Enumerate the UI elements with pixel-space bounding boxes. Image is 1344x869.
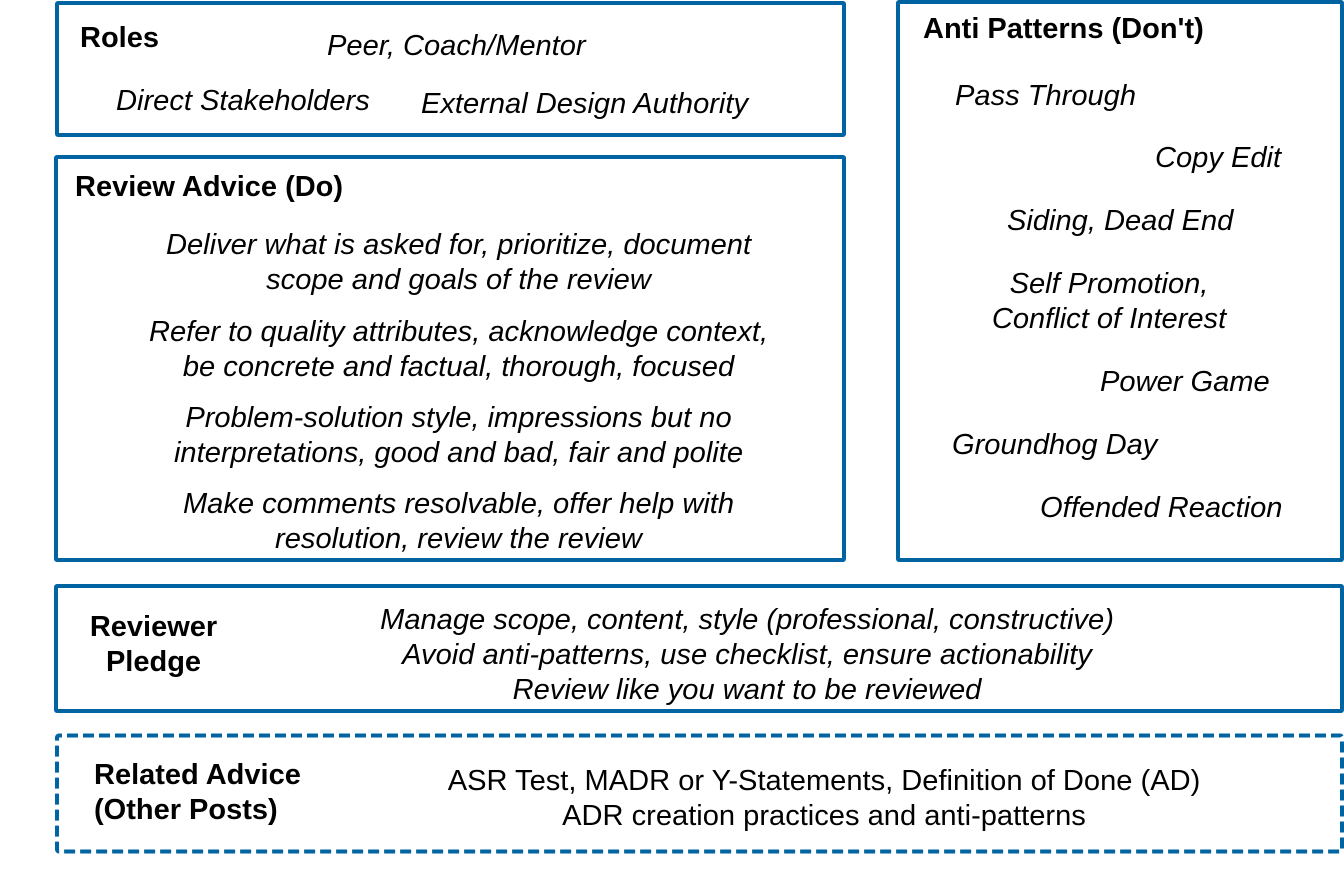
text: pass through: Pass Through bbox=[955, 80, 1136, 112]
text: self promotion: Self Promotion, bbox=[1010, 268, 1208, 300]
text: advice 3: interpretations, good and bad, fair and polite bbox=[174, 437, 743, 469]
text: pledge bbox=[380, 604, 1114, 706]
text: direct stakeholders: Direct Stakeholders bbox=[116, 85, 370, 117]
text: self promotion bbox=[992, 268, 1228, 335]
text: siding, dead end: Siding, Dead End bbox=[1007, 205, 1233, 237]
heading: review advice: Review Advice (Do) bbox=[75, 171, 343, 203]
text: related: ASR Test, MADR or Y-Statements, Definition of Done (AD) bbox=[448, 765, 1200, 797]
heading: reviewer pledge: Pledge bbox=[106, 646, 201, 678]
panel: anti patterns bbox=[896, 0, 1344, 562]
text: advice 4 bbox=[183, 488, 734, 555]
text: advice 3: Problem-solution style, impressions but no bbox=[185, 402, 732, 434]
text: self promotion: Conflict of Interest bbox=[992, 303, 1226, 335]
panel: roles bbox=[55, 1, 846, 137]
text: advice 1 bbox=[166, 229, 752, 296]
panel: review advice bbox=[54, 155, 846, 562]
text: advice 3 bbox=[174, 402, 743, 469]
heading: reviewer pledge: Reviewer bbox=[90, 611, 217, 643]
panel: reviewer pledge bbox=[54, 584, 1344, 713]
text: advice 2: Refer to quality attributes, acknowledge context, bbox=[149, 316, 768, 348]
text: external design authority: External Design Authority bbox=[421, 88, 748, 120]
text: advice 4: Make comments resolvable, offer help with bbox=[183, 488, 734, 520]
heading: related advice bbox=[94, 759, 301, 826]
text: power game: Power Game bbox=[1100, 366, 1270, 398]
text: groundhog day: Groundhog Day bbox=[952, 429, 1157, 461]
text: advice 1: scope and goals of the review bbox=[266, 264, 651, 296]
text: advice 4: resolution, review the review bbox=[275, 523, 642, 555]
text: related: ADR creation practices and anti-patterns bbox=[562, 800, 1086, 832]
heading: roles: Roles bbox=[80, 22, 159, 54]
text: advice 2 bbox=[149, 316, 768, 383]
text: offended reaction: Offended Reaction bbox=[1040, 492, 1282, 524]
text: advice 1: Deliver what is asked for, prioritize, document bbox=[166, 229, 751, 261]
heading: reviewer pledge bbox=[90, 611, 217, 678]
heading: related advice: Related Advice bbox=[94, 759, 301, 791]
heading: anti patterns: Anti Patterns (Don't) bbox=[923, 13, 1204, 45]
text: pledge: Manage scope, content, style (professional, constructive) bbox=[380, 604, 1114, 636]
text: pledge: Review like you want to be reviewed bbox=[513, 674, 981, 706]
heading: related advice: (Other Posts) bbox=[94, 794, 278, 826]
text: advice 2: be concrete and factual, thorough, focused bbox=[183, 351, 734, 383]
text: pledge: Avoid anti-patterns, use checklist, ensure actionability bbox=[402, 639, 1092, 671]
text: related bbox=[448, 765, 1200, 832]
text: peer, coach/mentor: Peer, Coach/Mentor bbox=[327, 30, 586, 62]
text: copy edit: Copy Edit bbox=[1155, 142, 1281, 174]
